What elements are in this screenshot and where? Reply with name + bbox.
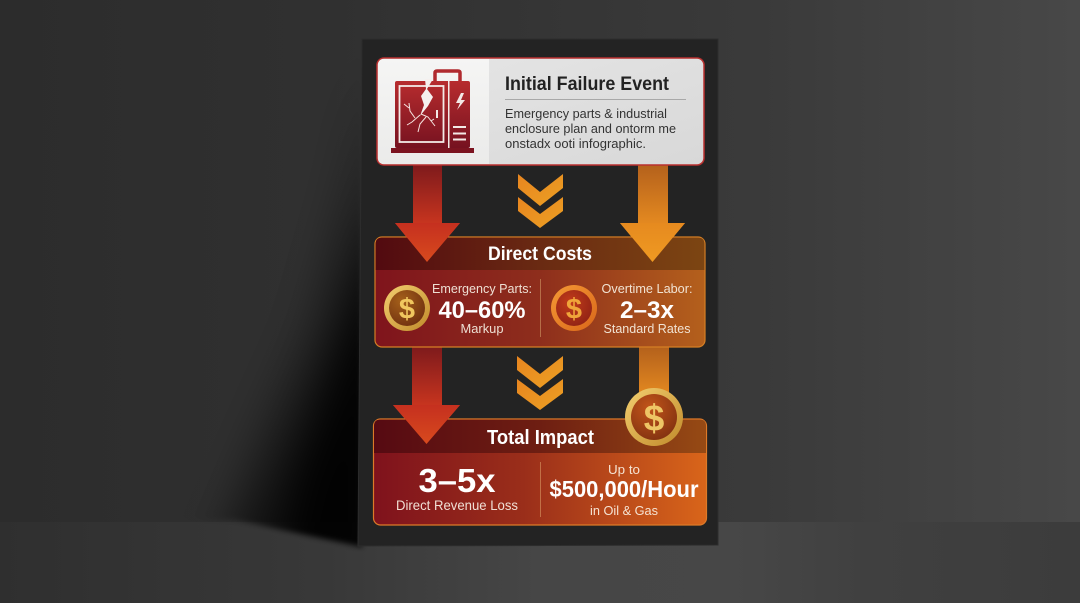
- panel: direct costs: [375, 223, 705, 347]
- icon: orange dollar coin: $: [566, 294, 582, 326]
- panel: initial failure event: [377, 58, 704, 165]
- heading: direct costs: Direct Costs: [488, 244, 592, 265]
- stat: overtime labor: 2–3x: [620, 297, 675, 324]
- arrow: right orange top: [620, 165, 685, 262]
- stat: up to $500,000/hour: in Oil & Gas: [590, 503, 658, 518]
- body text: enclosure plan and ontorm me: [505, 122, 676, 136]
- stat: overtime labor: Overtime Labor:: [602, 281, 692, 296]
- poster board: [358, 39, 718, 546]
- stat: direct revenue loss: 3–5x: [418, 462, 496, 499]
- arrow: right orange middle: [639, 347, 669, 397]
- icon: large dollar coin: [625, 388, 683, 446]
- stat: overtime labor: [602, 281, 692, 336]
- stat: up to $500,000/hour: Up to: [608, 462, 640, 477]
- stat: overtime labor: Standard Rates: [604, 321, 691, 336]
- heading: initial failure event: Initial Failure Event: [505, 73, 669, 95]
- body text: onstadx ooti infographic.: [505, 137, 646, 151]
- stat: emergency parts: Emergency Parts:: [432, 281, 532, 296]
- arrow: left red middle: [393, 347, 460, 444]
- icon: cracked enclosure: [391, 71, 474, 153]
- stat: up to $500,000/hour: $500,000/Hour: [550, 476, 699, 502]
- stat: emergency parts: 40–60%: [438, 297, 526, 324]
- arrow tips over panel: [395, 223, 685, 262]
- chevrons: upper: [518, 174, 563, 228]
- icon: orange dollar coin: [551, 285, 597, 331]
- stat: emergency parts: [432, 281, 532, 336]
- icon: gold dollar coin: [384, 285, 430, 331]
- stat: up to $500,000/hour: [550, 462, 699, 518]
- body text: Emergency parts & industrial: [505, 107, 667, 121]
- stat: emergency parts: Markup: [460, 321, 504, 336]
- floor: [0, 522, 1080, 603]
- arrow: left red top: [395, 165, 460, 262]
- icon: gold dollar coin: $: [399, 294, 415, 326]
- stat: direct revenue loss: Direct Revenue Loss: [396, 497, 518, 513]
- panel: total impact: [374, 388, 706, 525]
- arrow tip over panel: [393, 405, 460, 444]
- stat: direct revenue loss: [396, 462, 518, 513]
- body text: [505, 107, 676, 151]
- icon: large dollar coin: $: [644, 398, 665, 438]
- heading: total impact: Total Impact: [487, 427, 594, 449]
- poster shadow: [222, 168, 364, 549]
- chevrons: lower: [517, 356, 563, 410]
